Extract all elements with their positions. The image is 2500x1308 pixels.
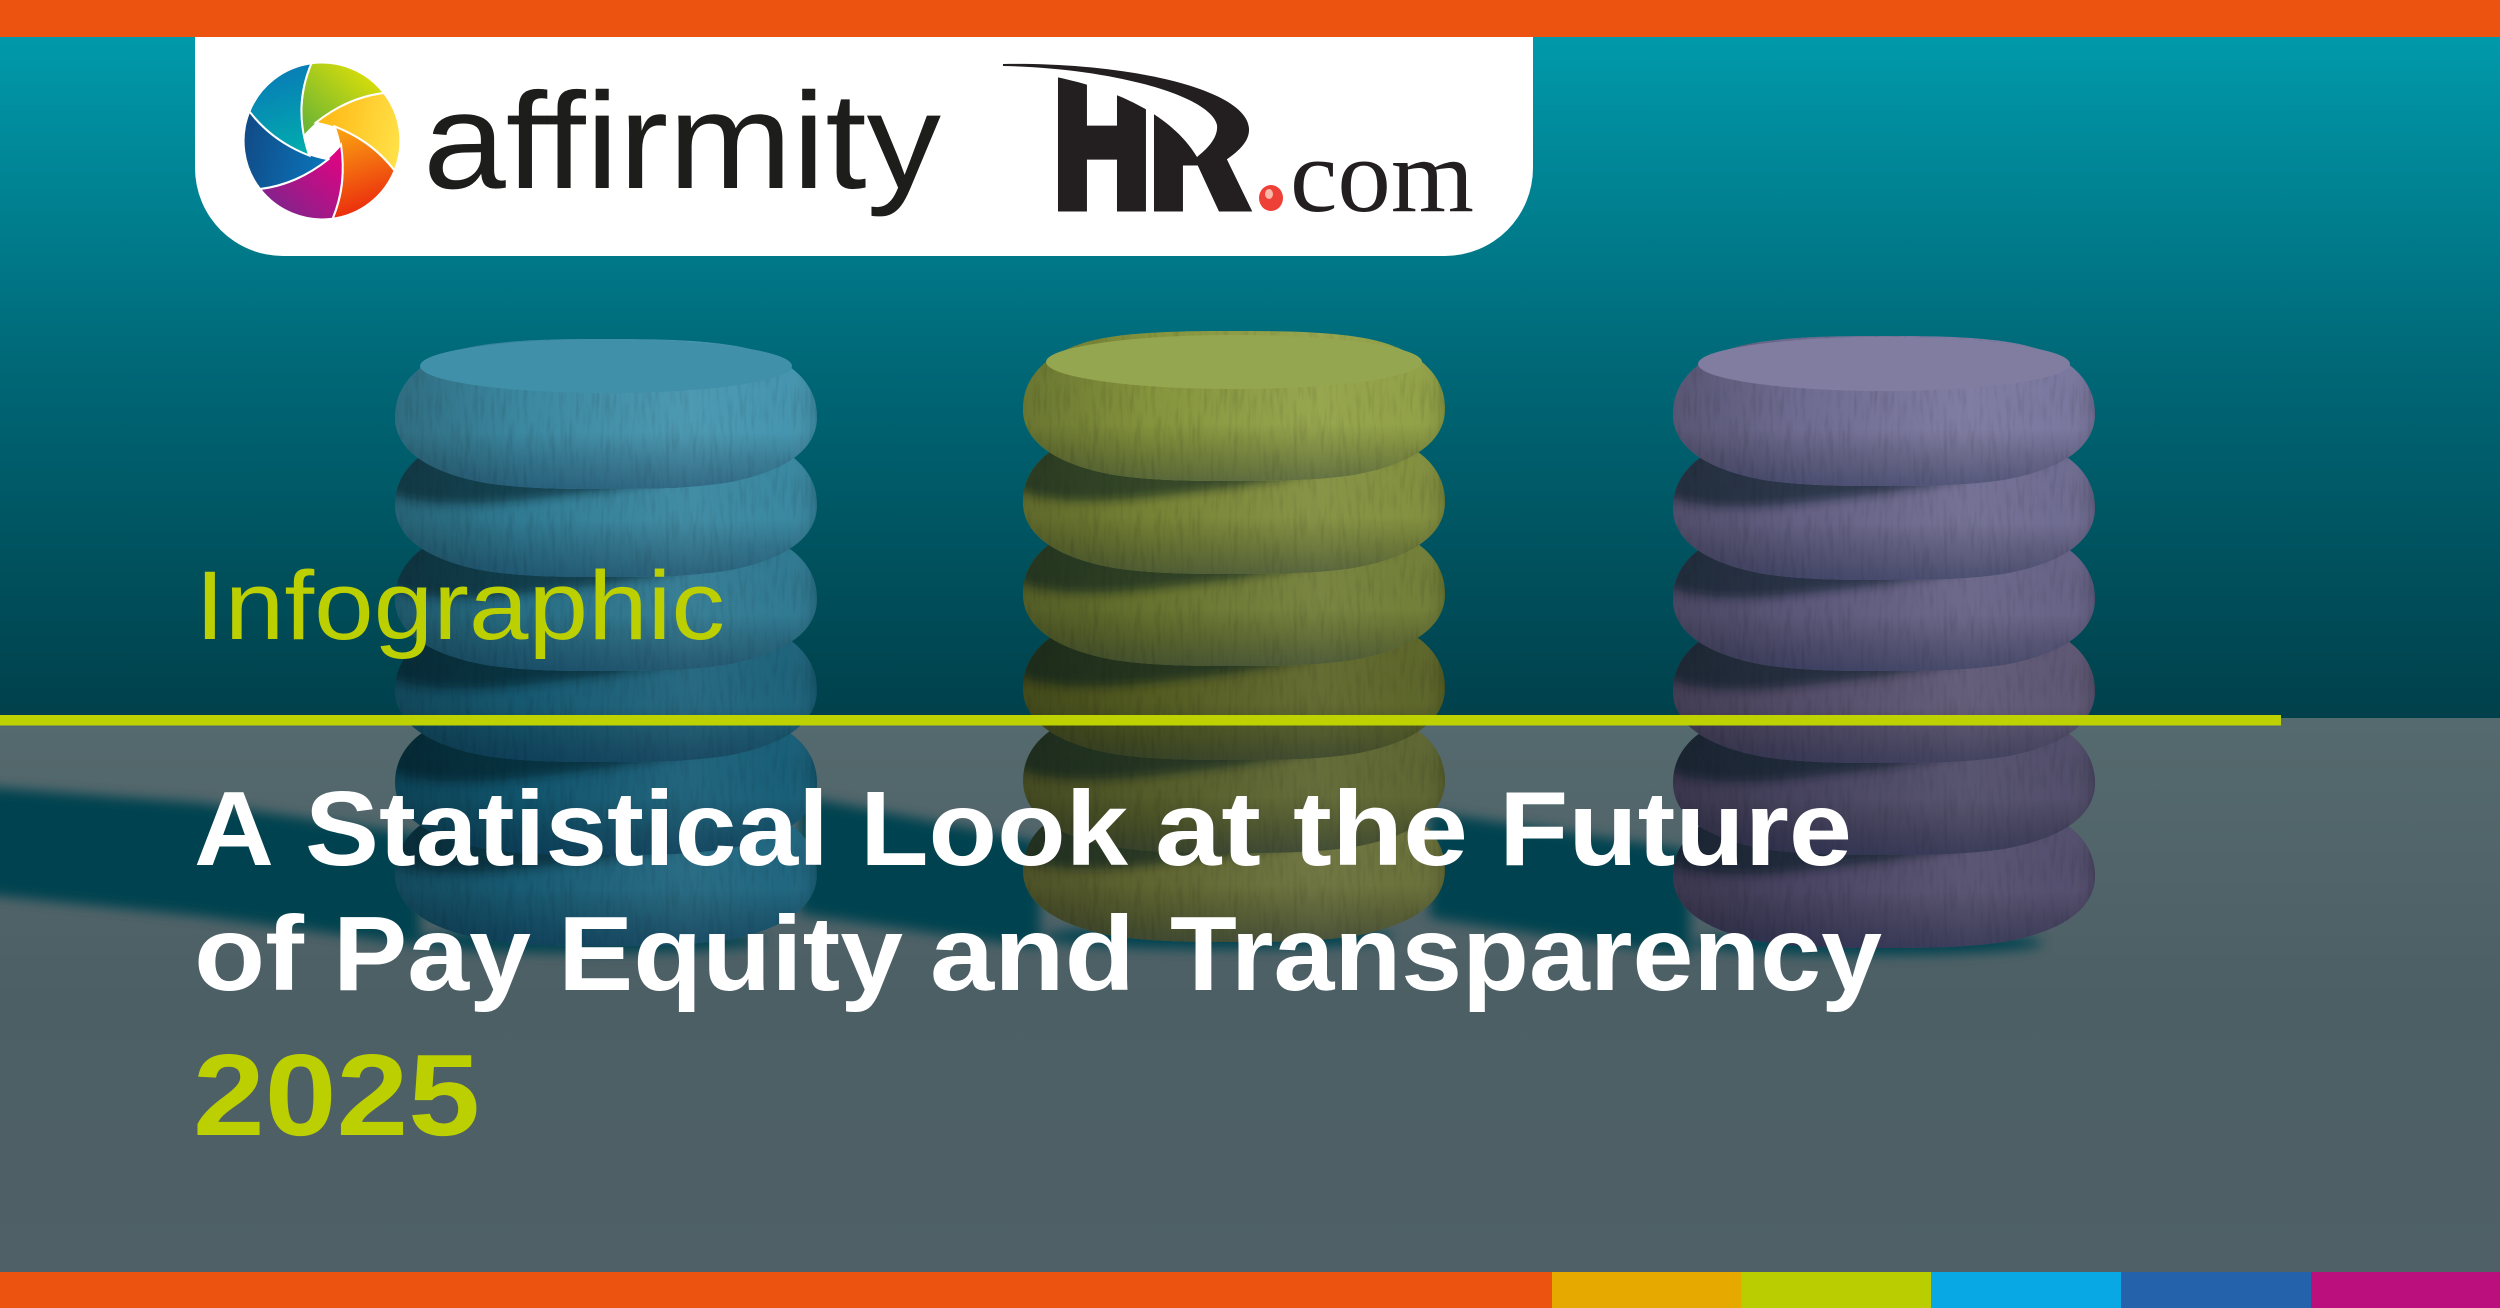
top orange bar: [0, 0, 2500, 37]
icon: affirmity aperture logo: [223, 48, 421, 234]
title: Transparency: [1170, 895, 1882, 1013]
photo table surface: [0, 718, 2500, 1274]
title: the: [1293, 770, 1468, 888]
title: Future: [1499, 770, 1852, 888]
title: [194, 770, 1882, 1013]
title: of: [194, 895, 305, 1013]
photo background wall: [0, 37, 2500, 719]
title: Equity: [558, 895, 903, 1013]
HR.com logo: HR: [1054, 47, 1246, 243]
stack: blue discs: [338, 320, 817, 946]
logo panel: [195, 37, 1533, 256]
affirmity wordmark: affirmity: [423, 65, 942, 218]
HR.com logo: [1003, 47, 1474, 243]
stack: purple discs: [1616, 323, 2095, 948]
HR.com logo: com: [1290, 117, 1474, 234]
cast shadows on table: [0, 784, 2043, 956]
divider line: [0, 715, 2281, 726]
title: Look: [860, 770, 1129, 888]
stack: green discs: [966, 317, 1445, 942]
title: Statistical: [305, 770, 829, 888]
title: A: [194, 770, 274, 888]
title: Pay: [333, 895, 531, 1013]
bottom colour bar: [0, 1272, 2500, 1308]
title: at: [1155, 770, 1261, 888]
subtitle: Infographic: Infographic: [195, 551, 725, 660]
title: and: [930, 895, 1135, 1013]
year: 2025: 2025: [193, 1030, 480, 1160]
